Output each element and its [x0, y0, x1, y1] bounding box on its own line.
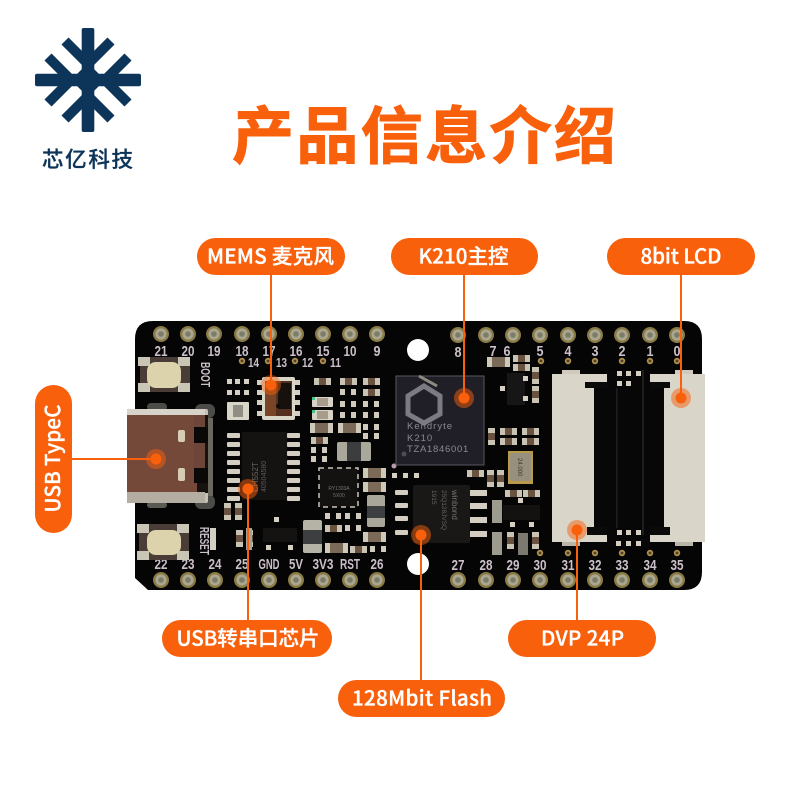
bottom header pins — [153, 572, 685, 588]
silkscreen pin labels — [154, 343, 684, 574]
silkscreen pin labels: 11 — [330, 355, 341, 370]
label: MEMS microphone — [197, 238, 345, 275]
label: 8bit LCD: 8bit LCD — [640, 240, 722, 270]
silkscreen pin labels: 4 — [564, 343, 572, 360]
silkscreen pin labels: 24 — [208, 556, 222, 573]
silkscreen pin labels: 21 — [154, 343, 168, 360]
silkscreen pin labels: 32 — [588, 557, 602, 574]
QFN chip: 5X00 — [333, 493, 345, 499]
flash chip Winbond: winbond — [450, 489, 459, 520]
BOOT button — [138, 357, 190, 392]
silkscreen pin labels: 35 — [670, 557, 684, 574]
silkscreen pin labels: 17 — [262, 343, 276, 360]
mounting holes — [407, 339, 429, 575]
K210 main chip: TZA1846001 — [407, 444, 469, 455]
silkscreen pin labels: 28 — [480, 557, 492, 574]
K210 main chip — [396, 376, 484, 465]
label: DVP 24P: DVP 24P — [541, 622, 624, 652]
title: 产品信息介绍 — [232, 86, 616, 176]
silkscreen pin labels: RST — [340, 556, 360, 573]
silkscreen pin labels: 1 — [646, 343, 654, 360]
silkscreen pin labels: 31 — [562, 557, 574, 574]
silkscreen pin labels: 7 — [490, 343, 496, 360]
flash chip Winbond: 1915 — [430, 490, 437, 505]
flash chip Winbond — [395, 485, 487, 543]
silkscreen pin labels: GND — [258, 556, 280, 573]
silkscreen pin labels: 13 — [276, 355, 287, 370]
logo: snowflake mark — [35, 28, 141, 132]
circuit board — [127, 321, 705, 590]
Flash leader — [411, 525, 431, 680]
silkscreen pin labels: 22 — [154, 556, 168, 573]
silkscreen pin labels: 10 — [344, 343, 356, 360]
silkscreen pin labels: 25 — [236, 556, 248, 573]
label: MEMS microphone: MEMS 麦克风 — [207, 240, 334, 270]
label: 128Mbit Flash: 128Mbit Flash — [352, 682, 492, 712]
silkscreen pin labels: 18 — [236, 343, 248, 360]
FPC connector — [552, 370, 705, 546]
crystal oscillator: 24.000 — [516, 458, 522, 477]
K210 main chip: Kendryte — [407, 421, 453, 432]
silkscreen pin labels: 5 — [536, 343, 544, 360]
flash chip Winbond: 25Q128JVSQ — [440, 490, 447, 530]
silkscreen pin labels: 5V — [289, 556, 303, 573]
label: USB TypeC: USB TypeC — [36, 404, 66, 512]
silkscreen pin labels: 0 — [674, 343, 680, 360]
label: K210 — [391, 238, 538, 275]
MEMS leader — [261, 275, 281, 395]
USB-to-serial chip CH552T: 40504580 — [261, 461, 268, 492]
label: DVP 24P — [508, 620, 656, 657]
USB-to-serial chip CH552T — [227, 432, 300, 501]
DVP leader — [567, 520, 587, 620]
silkscreen pin labels: 15 — [316, 343, 330, 360]
crystal oscillator — [508, 451, 533, 484]
QFN chip: RY1303A — [328, 486, 350, 492]
silkscreen pin labels: 8 — [454, 344, 462, 361]
USB TypeC leader — [72, 449, 166, 469]
small components — [210, 355, 540, 555]
silkscreen pin labels: 6 — [504, 343, 510, 360]
silkscreen pin labels: 14 — [248, 355, 260, 370]
silkscreen pin labels: RESET — [197, 527, 212, 555]
RESET button — [137, 524, 189, 560]
small vias — [239, 358, 680, 556]
K210 main chip: K210 — [407, 433, 433, 444]
silkscreen pin labels: 16 — [290, 343, 302, 360]
label: K210: K210主控 — [418, 240, 508, 270]
USB serial leader — [238, 479, 258, 620]
silkscreen pin labels: 27 — [452, 557, 464, 574]
label: USB TypeC — [35, 385, 72, 533]
label: USB serial chip — [162, 620, 332, 657]
USB Type-C connector — [127, 403, 215, 509]
callout lines and markers — [72, 275, 691, 680]
logo text: 芯亿科技 — [42, 143, 133, 174]
silkscreen pin labels: 23 — [182, 556, 194, 573]
silkscreen pin labels: 29 — [506, 557, 520, 574]
label: 128Mbit Flash — [338, 680, 505, 717]
silkscreen pin labels: 19 — [208, 343, 220, 360]
silkscreen pin labels: 2 — [618, 343, 626, 360]
label: 8bit LCD — [607, 238, 755, 275]
MEMS microphone — [257, 377, 300, 420]
K210 leader — [454, 275, 474, 408]
USB-to-serial chip CH552T: CH552T — [251, 462, 260, 492]
board outline — [135, 321, 702, 590]
silkscreen pin labels: 20 — [182, 343, 194, 360]
QFN chip — [319, 468, 358, 507]
silkscreen pin labels: 9 — [374, 343, 380, 360]
silkscreen pin labels: 30 — [534, 557, 546, 574]
silkscreen pin labels: 12 — [302, 355, 313, 370]
silkscreen pin labels: 3 — [592, 343, 598, 360]
silkscreen pin labels: 3V3 — [312, 556, 334, 573]
label: USB serial chip: USB转串口芯片 — [176, 622, 320, 652]
LCD leader — [671, 275, 691, 408]
silkscreen pin labels: 34 — [644, 557, 657, 574]
silkscreen pin labels: BOOT — [198, 362, 213, 387]
silkscreen pin labels: 26 — [370, 556, 384, 573]
silkscreen pin labels: 33 — [616, 557, 628, 574]
top header pins — [153, 326, 685, 343]
